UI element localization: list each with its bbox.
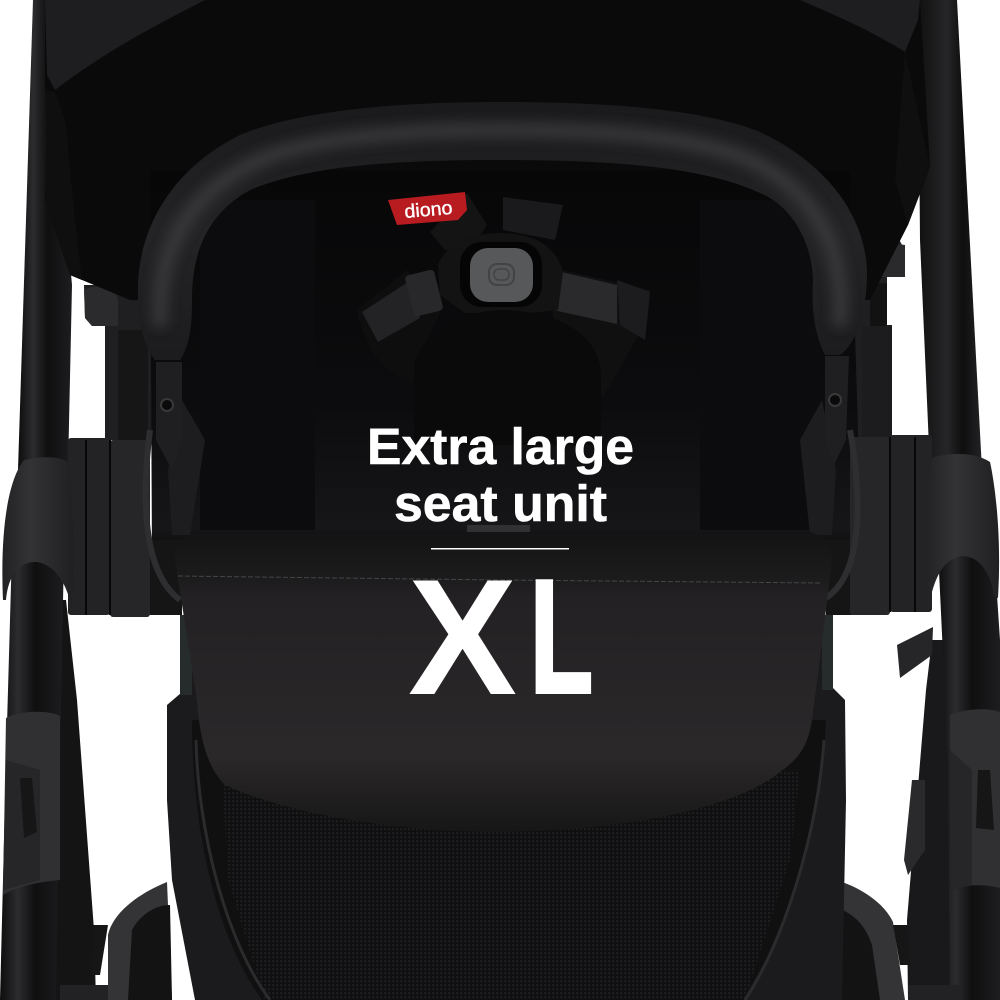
icon: left hinge bbox=[68, 430, 182, 617]
panel: seat back bbox=[150, 170, 862, 560]
icon: brand tag: diono bbox=[404, 198, 453, 223]
icon: right hinge bbox=[826, 430, 932, 615]
icon: left frame upper pole bbox=[18, 0, 72, 470]
icon: right handlebar bracket bbox=[825, 356, 849, 465]
icon: left frame lower tube bbox=[0, 550, 64, 1000]
panel: footrest cushion bbox=[175, 532, 832, 832]
divider bbox=[431, 548, 569, 550]
heading: XL: L bbox=[530, 547, 593, 727]
icon: left wheel base bbox=[60, 882, 172, 1000]
heading: XL: X bbox=[408, 545, 517, 729]
icon: right sleeve bbox=[926, 454, 999, 610]
icon: brake lever bbox=[897, 627, 933, 678]
panel: lower footwell bbox=[167, 615, 846, 1000]
icon: buckle bbox=[438, 233, 563, 313]
icon: brand tag bbox=[388, 192, 467, 225]
icon: right lower joint bbox=[950, 709, 1000, 890]
icon: right frame lower tube bbox=[938, 550, 1000, 1000]
icon: right wheel base bbox=[830, 882, 962, 1000]
title: extra large seat unit: Extra large bbox=[367, 418, 634, 475]
icon: left upper strut bbox=[84, 285, 155, 440]
heading: XL bbox=[408, 545, 593, 729]
icon: handlebar bbox=[138, 102, 867, 360]
icon: left lower joint bbox=[3, 712, 60, 895]
icon: right upper strut bbox=[850, 215, 905, 441]
icon: left sleeve bbox=[2, 457, 73, 610]
panel: crotch pad bbox=[414, 310, 601, 445]
panel: harness bbox=[357, 193, 650, 397]
icon: left rear lower pole bbox=[50, 600, 96, 1000]
icon: left handlebar bracket bbox=[156, 362, 182, 470]
panel: canopy bbox=[45, 0, 930, 300]
subtitle line: seat unit bbox=[394, 475, 607, 532]
icon: side clip bbox=[904, 780, 925, 875]
icon: right frame upper pole bbox=[918, 0, 982, 470]
icon: right rear lower pole bbox=[907, 640, 950, 1000]
